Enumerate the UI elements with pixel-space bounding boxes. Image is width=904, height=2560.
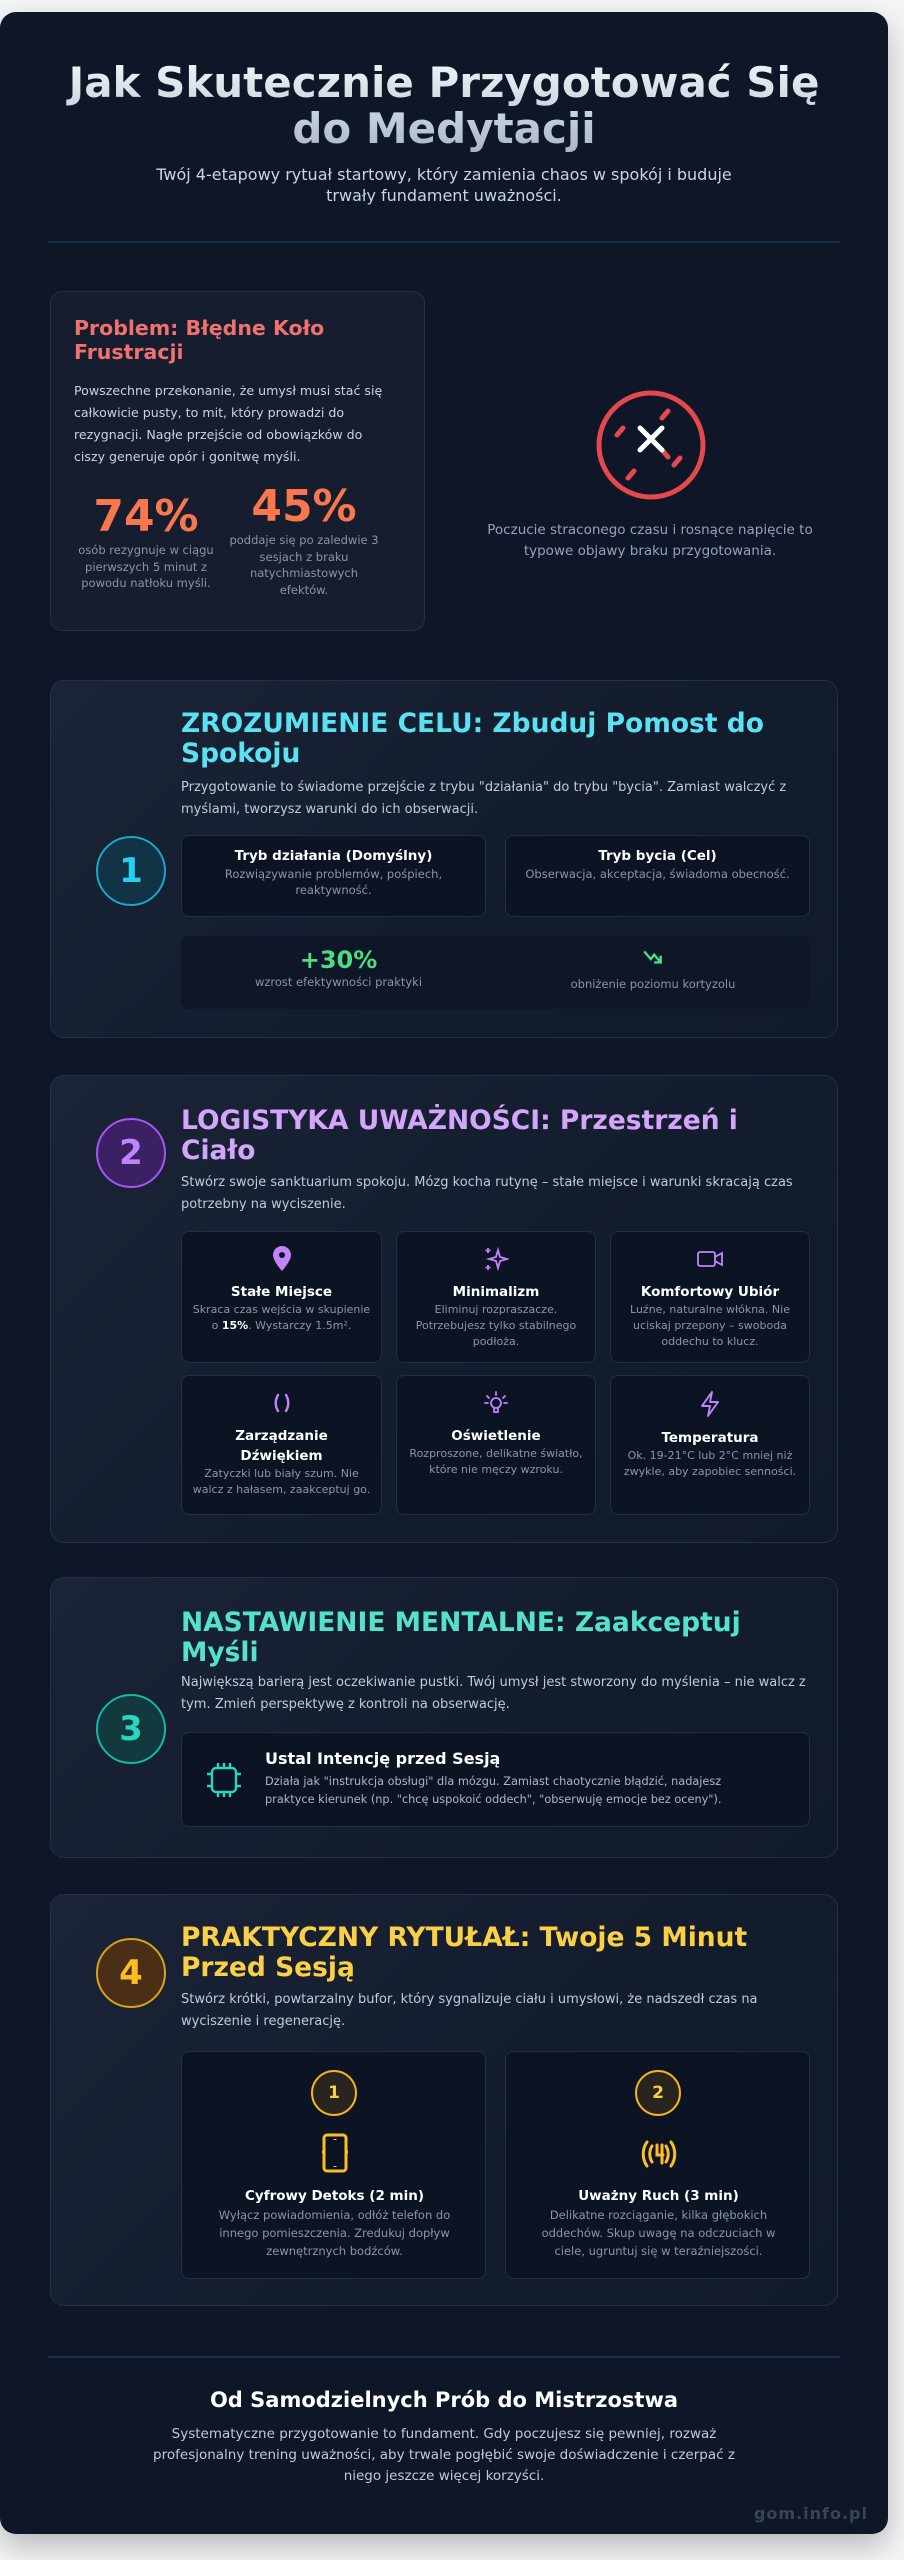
stat cortisol <box>571 950 735 991</box>
ritual box 2: Delikatne rozciąganie, kilka głębokich oddechów. Skup uwagę na odczuciach w ciele, ugruntuj się w teraźniejszości. <box>542 2208 775 2258</box>
stat 74%: osób rezygnuje w ciągu pierwszych 5 minut z powodu natłoku myśli. <box>78 543 214 590</box>
icon caption: Poczucie straconego czasu i rosnące napięcie to typowe objawy braku przygotowania. <box>487 522 813 559</box>
panel: step 2 <box>50 1075 838 1543</box>
title: Jak Skutecznie Przygotować Się <box>69 58 819 107</box>
tile: ubior: Luźne, naturalne włókna. Nie uciskaj przepony – swoboda oddechu to klucz. <box>630 1303 790 1348</box>
stat +30%: wzrost efektywności praktyki <box>255 975 422 989</box>
stat +30% <box>255 946 422 989</box>
tile: ubior <box>610 1231 810 1363</box>
title: do Medytacji <box>292 104 596 153</box>
footer text: Systematyczne przygotowanie to fundament. Gdy poczujesz się pewniej, rozważ profesjonalny trening uważności, aby trwale pogłębić swoje doświadczenie i czerpać z niego jeszcze więcej korzyści. <box>153 2426 735 2484</box>
stat 74%: 74% <box>93 491 199 542</box>
ritual box 2: Uważny Ruch (3 min) <box>578 2188 739 2204</box>
stats box <box>181 936 810 1009</box>
stat 74% <box>78 491 214 590</box>
tile: dzwiek <box>181 1375 382 1515</box>
tile: dzwiek: Zarządzanie <box>235 1428 328 1444</box>
icon: chip <box>207 1763 241 1797</box>
tile: minimalizm: Minimalizm <box>453 1284 539 1300</box>
panel: step 4 <box>50 1894 838 2306</box>
ritual box 1: 1 <box>328 2083 340 2103</box>
ritual box 1: Cyfrowy Detoks (2 min) <box>245 2188 424 2204</box>
heading 2: LOGISTYKA UWAŻNOŚCI: Przestrzeń i Ciało <box>181 1105 738 1166</box>
ritual box 1 <box>181 2051 486 2279</box>
number 3 <box>96 1694 166 1764</box>
tile: dzwiek: Dźwiękiem <box>240 1448 323 1464</box>
box: tryb bycia: Obserwacja, akceptacja, świadoma obecność. <box>525 867 790 881</box>
heading 3: NASTAWIENIE MENTALNE: Zaakceptuj Myśli <box>181 1607 741 1668</box>
intention box: Działa jak "instrukcja obsługi" dla mózgu. Zamiast chaotycznie błądzić, nadajesz praktyce kierunek (np. "chcę uspokoić oddech", "obserwuję emocje bez oceny"). <box>265 1775 722 1806</box>
ritual box 2: 2 <box>652 2083 664 2103</box>
tile: ubior: Komfortowy Ubiór <box>641 1284 779 1300</box>
text 1: Przygotowanie to świadome przejście z trybu "działania" do trybu "bycia". Zamiast walczyć z myślami, tworzysz warunki do ich obserwacji. <box>181 780 786 817</box>
number 1 <box>96 836 166 906</box>
subtitle: Twój 4-etapowy rytuał startowy, który zamienia chaos w spokój i buduje trwały fundament uważności. <box>156 165 732 205</box>
tile: oswietlenie: Oświetlenie <box>451 1428 541 1444</box>
ritual box 1: Wyłącz powiadomienia, odłóż telefon do innego pomieszczenia. Zredukuj dopływ zewnętrznych bodźców. <box>219 2208 450 2258</box>
panel: problem <box>50 291 425 631</box>
box: tryb bycia <box>505 835 810 917</box>
heading 1: ZROZUMIENIE CELU: Zbuduj Pomost do Spokoju <box>181 708 764 769</box>
tile: temperatura: Temperatura <box>661 1430 759 1446</box>
stat cortisol: obniżenie poziomu kortyzolu <box>571 977 735 991</box>
stat 45%: poddaje się po zaledwie 3 sesjach z braku natychmiastowych efektów. <box>229 533 379 596</box>
box: tryb bycia: Tryb bycia (Cel) <box>598 848 717 864</box>
panel: step 3 <box>50 1577 838 1858</box>
intention box <box>181 1732 810 1827</box>
tile: minimalizm <box>396 1231 596 1363</box>
tile: dzwiek: Zatyczki lub biały szum. Nie walcz z hałasem, zaakceptuj go. <box>193 1467 370 1496</box>
number 2: 2 <box>119 1133 143 1173</box>
problem text: Powszechne przekonanie, że umysł musi stać się całkowicie pusty, to mit, który prowadzi do rezygnacji. Nagłe przejście od obowiązków do ciszy generuje opór i gonitwę myśli. <box>74 383 382 464</box>
heading 4: PRAKTYCZNY RYTUŁAŁ: Twoje 5 Minut Przed Sesją <box>181 1922 747 1983</box>
text 2: Stwórz swoje sanktuarium spokoju. Mózg kocha rutynę – stałe miejsce i warunki skracają czas potrzebny na wyciszenie. <box>181 1175 793 1212</box>
tile: minimalizm: Eliminuj rozpraszacze. Potrzebujesz tylko stabilnego podłoża. <box>416 1303 576 1348</box>
number 4: 4 <box>119 1953 143 1993</box>
icon: broken clock <box>596 390 706 500</box>
problem heading: Problem: Błędne Koło Frustracji <box>74 316 324 364</box>
stat 45% <box>229 481 379 596</box>
text 3: Największą barierą jest oczekiwanie pustki. Twój umysł jest stworzony do myślenia – nie walcz z tym. Zmień perspektywę z kontroli na obserwację. <box>181 1675 806 1712</box>
number 4 <box>96 1938 166 2008</box>
tile: stale miejsce <box>181 1231 382 1363</box>
panel: step 1 <box>50 680 838 1038</box>
watermark: gom.info.pl <box>754 2504 868 2523</box>
box: tryb dzialania <box>181 835 486 917</box>
text 4: Stwórz krótki, powtarzalny bufor, który sygnalizuje ciału i umysłowi, że nadszedł czas na wyciszenie i regenerację. <box>181 1992 758 2029</box>
box: tryb dzialania: Tryb działania (Domyślny) <box>235 848 432 864</box>
title <box>0 60 888 152</box>
footer heading: Od Samodzielnych Prób do Mistrzostwa <box>210 2388 678 2412</box>
tile: temperatura: Ok. 19-21°C lub 2°C mniej niż zwykle, aby zapobiec senności. <box>624 1449 796 1478</box>
ritual box 2 <box>505 2051 810 2279</box>
stat +30%: +30% <box>300 946 377 974</box>
tile: oswietlenie <box>396 1375 596 1515</box>
tile: oswietlenie: Rozproszone, delikatne światło, które nie męczy wzroku. <box>409 1447 583 1476</box>
box: tryb dzialania: Rozwiązywanie problemów, pośpiech, reaktywność. <box>225 867 442 897</box>
number 3: 3 <box>119 1709 143 1749</box>
stat 45%: 45% <box>251 481 357 532</box>
tile: stale miejsce: Stałe Miejsce <box>231 1284 332 1300</box>
tile: temperatura <box>610 1375 810 1515</box>
number 2 <box>96 1118 166 1188</box>
tile: stale miejsce: Skraca czas wejścia w skupienie o 15%. Wystarczy 1.5m². <box>193 1303 370 1332</box>
intention box: Ustal Intencję przed Sesją <box>265 1749 500 1768</box>
number 1: 1 <box>119 851 143 891</box>
